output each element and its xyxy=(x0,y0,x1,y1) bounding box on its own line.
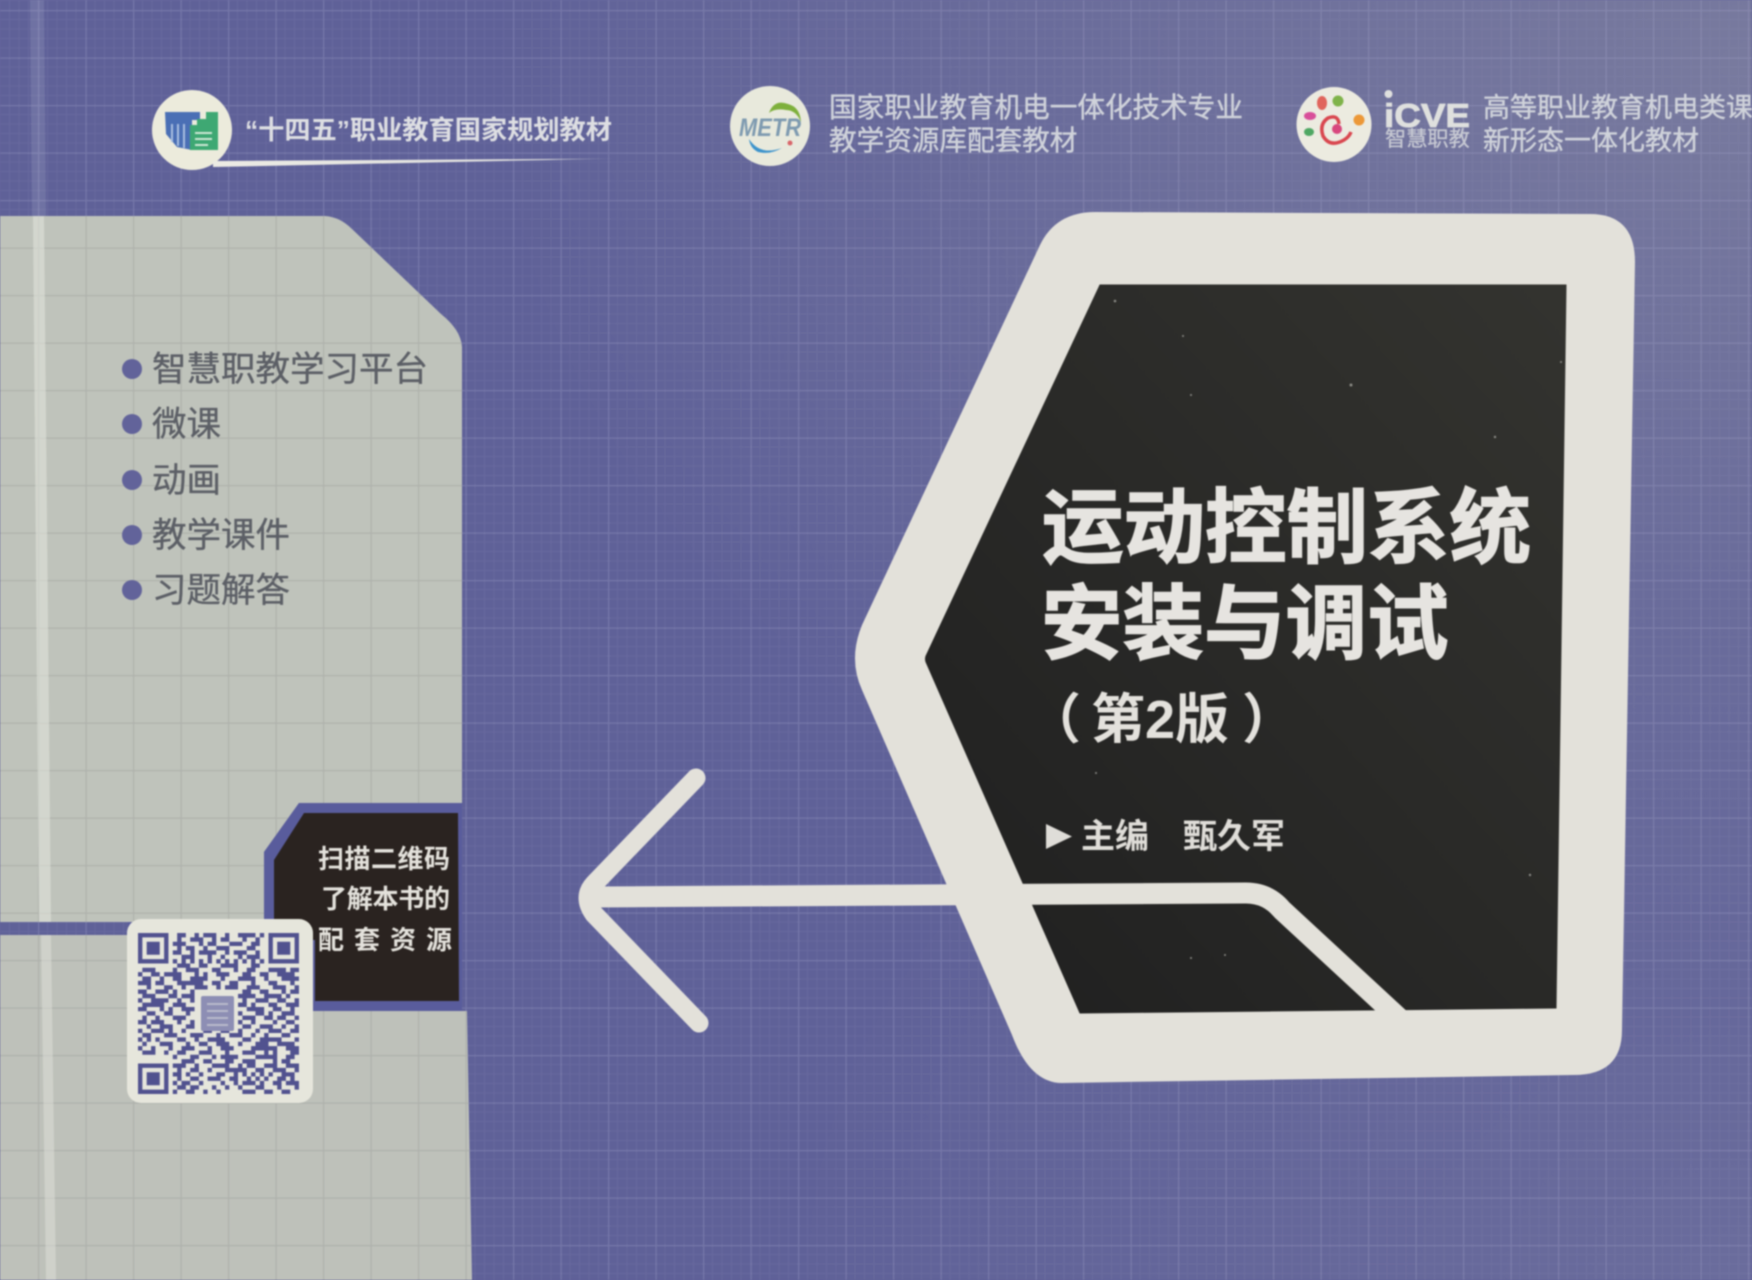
header text: METR textbook xyxy=(829,92,1243,156)
panel: purple backing of the QR label xyxy=(128,803,462,1011)
QR code modules xyxy=(138,933,299,1094)
QR centre emblem xyxy=(201,996,234,1031)
header logo: 十四五 planning textbook xyxy=(152,90,232,170)
arrow: left-pointing line from the title frame xyxy=(588,778,1402,1023)
list item: 动画 xyxy=(122,462,221,500)
arrow shaft and bend xyxy=(592,893,1402,1021)
list item: 智慧职教学习平台: 智慧职教学习平台 xyxy=(152,351,428,389)
QR caption text: 扫描二维码 xyxy=(318,844,450,874)
QR caption text: 了解本书的 xyxy=(321,884,450,914)
QR caption text xyxy=(318,844,452,955)
icon: green book xyxy=(190,112,218,150)
author line: 主编 xyxy=(1081,818,1149,856)
panel: dark QR caption box xyxy=(274,813,459,1001)
iCVE wordmark xyxy=(1384,90,1470,151)
METR wordmark: METR xyxy=(739,114,801,142)
title: line 2: 安装与调试 xyxy=(1041,579,1449,670)
icon: green arc xyxy=(769,103,801,122)
icon: blue swoosh xyxy=(749,139,782,153)
edition: 第2版 xyxy=(1091,690,1229,750)
title block xyxy=(1027,483,1531,750)
icon: blue book xyxy=(165,112,200,150)
header text: 十四五: “十四五”职业教育国家规划教材 xyxy=(245,115,612,145)
author line xyxy=(1046,818,1285,856)
list item: 动画: 动画 xyxy=(152,462,221,500)
header text: METR textbook: 教学资源库配套教材 xyxy=(829,125,1077,156)
header logo: METR xyxy=(730,86,810,166)
list item: 微课 xyxy=(122,406,221,444)
icon: coloured dots xyxy=(1304,96,1364,136)
arrow head xyxy=(588,778,699,1023)
dust specks on dark panel xyxy=(1095,300,1562,959)
panel: grey lower side panel xyxy=(0,935,472,1280)
spine fold highlight xyxy=(30,0,56,1280)
list item: 教学课件: 教学课件 xyxy=(152,517,290,555)
author line: 甄久军 xyxy=(1183,818,1285,856)
title panel: dark interior xyxy=(926,285,1566,1013)
title frame: white outline xyxy=(855,212,1635,1083)
header logo: iCVE swirl xyxy=(1296,87,1372,162)
iCVE wordmark: 智慧职教 xyxy=(1385,127,1470,151)
list item: 习题解答: 习题解答 xyxy=(152,572,290,610)
icon: red spiral xyxy=(1322,117,1351,143)
list item: 微课: 微课 xyxy=(152,406,221,444)
QR caption text: 配套资源 xyxy=(318,925,452,955)
header text: METR textbook: 国家职业教育机电一体化技术专业 xyxy=(829,92,1243,123)
panel: grey upper side panel xyxy=(0,216,462,922)
title: line 1: 运动控制系统 xyxy=(1042,483,1531,574)
iCVE wordmark: iCVE xyxy=(1384,97,1470,134)
icon: triangle marker xyxy=(1046,824,1072,849)
header swoosh underline xyxy=(213,158,622,167)
header text: iCVE textbook xyxy=(1483,93,1752,156)
edition: （ xyxy=(1027,690,1081,750)
QR code card xyxy=(127,919,313,1103)
header text: iCVE textbook: 新形态一体化教材 xyxy=(1483,126,1699,156)
edition: ） xyxy=(1242,690,1296,750)
list: resources bullets xyxy=(122,351,428,610)
edition xyxy=(1027,690,1296,750)
